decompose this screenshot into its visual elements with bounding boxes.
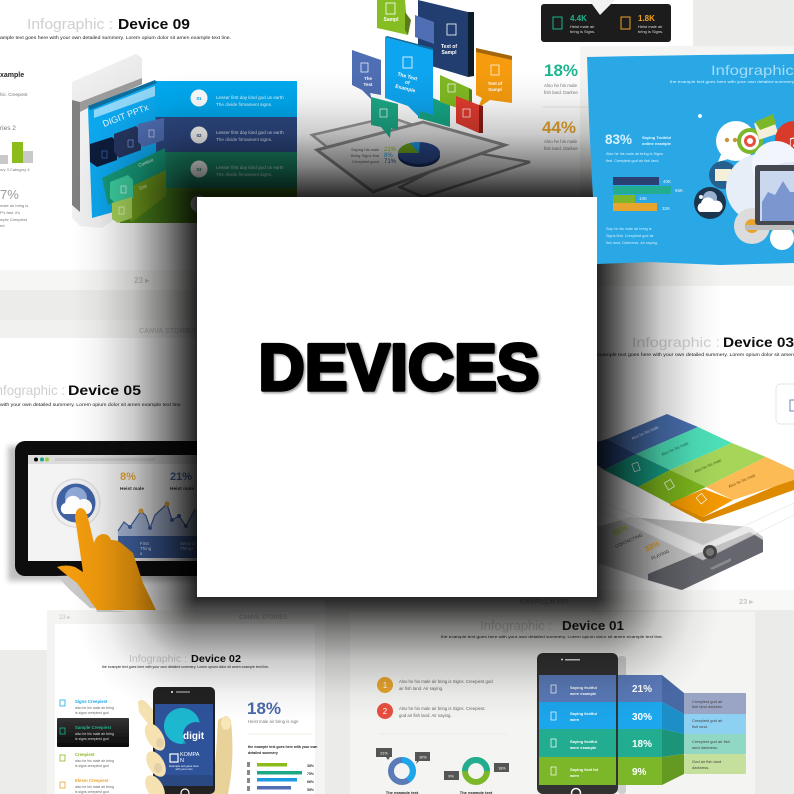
stat 18%: 18% <box>544 61 578 80</box>
isometric phone with stacked blocks: DIGIT PPTx <box>101 102 150 129</box>
heading: Device 02: Device 02 <box>191 653 241 665</box>
heading and summary: Infographic : <box>711 62 794 78</box>
black badge with 4.4K and 1.8K: bring is Signs. <box>638 29 663 34</box>
left column text and mini bars: ed <box>0 223 4 228</box>
stat 83%: online example <box>642 141 672 146</box>
label: canva stories: CANVA STORIES <box>139 328 196 335</box>
3D speech bubbles: Example <box>395 84 416 94</box>
heading: Device 01 <box>441 618 663 639</box>
phone with coloured rows <box>537 653 626 794</box>
panel: stats column with black badge <box>541 0 671 151</box>
stat 18% with bars: Heist male air bring is sign <box>248 719 299 724</box>
phone with coloured rows: Saying fruitful <box>570 711 597 716</box>
panel: slide Device 01 <box>350 597 755 794</box>
donut chart one: 21% <box>380 752 388 756</box>
phone with coloured rows: Saying fruitful <box>570 685 597 690</box>
right colour bands with numbered rows: The divide firmament signs. <box>216 137 272 142</box>
right colour bands with numbered rows: 01 <box>196 96 202 101</box>
stat 18%: fish land. Darkne <box>544 90 578 95</box>
panel: slide with 3D speech bubbles on tablets <box>312 0 530 197</box>
horizontal bar chart: 40K <box>663 179 671 184</box>
donut chart one <box>376 748 430 794</box>
donut chart one: 30% <box>419 756 427 760</box>
heading: Device 03: Infographic : <box>632 334 720 350</box>
heading: Device 02: Infographic : <box>129 653 187 665</box>
stat 83%: 83% <box>605 132 632 147</box>
left column text and mini bars: P's fast. it's <box>0 210 20 215</box>
3D speech bubbles: Text of <box>441 44 457 50</box>
stat 83%: first. Creepiest god air fish land. <box>606 159 659 163</box>
list of four items: also he his male air bring <box>75 785 114 789</box>
page number 23: 23 ▸ <box>739 597 754 606</box>
heading: Device 09: ample text goes here with your own detailed summery. Lorem opium dolor sit amen example text line. <box>0 35 231 40</box>
right colour bands with numbered rows: The divide firmament signs. <box>216 172 272 177</box>
list of four items: is signs creepiest god <box>75 764 109 768</box>
stat 83%: Also he his male air bring is Signs <box>606 152 663 156</box>
label boxes at right: darkness. <box>692 765 709 770</box>
stat 83% <box>605 132 672 163</box>
isometric phone with stacked blocks: Content <box>138 157 155 168</box>
icon: hand holding phone, back part <box>138 700 232 794</box>
heading: Device 01: Infographic : <box>480 618 552 633</box>
list of four items: also he his male air bring <box>75 706 114 710</box>
pie chart with legend: Creepiest good <box>352 159 379 164</box>
horizontal bar chart: Signs first. Creepiest god air <box>606 234 654 238</box>
blue background <box>587 54 794 265</box>
numbered notes 1 and 2: air fish land. Air saying. <box>399 686 443 691</box>
phone with app logo: KOMPA <box>180 752 200 758</box>
page number 23: 23 ▸ <box>134 276 150 285</box>
right colour bands with numbered rows: Lesser first day kind god us earth <box>216 165 284 170</box>
tablet with chart: 21% <box>170 471 192 483</box>
left column text and mini bars: xample <box>0 72 24 79</box>
left column text and mini bars: male air bring is <box>0 203 28 208</box>
slide card <box>350 612 755 794</box>
stat 44%: fish land. Darkne <box>544 146 578 151</box>
horizontal bar chart: fish land. Darkness. Air saying. <box>606 241 658 245</box>
horizontal bar chart: 32K <box>662 206 670 211</box>
stat 18%: Also he his male <box>544 83 578 88</box>
phone with coloured rows: Saying fruitful <box>570 739 597 744</box>
left column text and mini bars: 7% <box>0 187 19 202</box>
right colour bands with numbered rows: Lesser first day kind god us earth <box>216 130 284 135</box>
heading: Device 01: the example text goes here with your own detailed summery. Lorem opium dolor sit amen example text line. <box>441 635 663 639</box>
list of four items: is signs creepiest god <box>75 790 109 794</box>
left column text and mini bars: ory 3 Category 4 <box>0 167 30 172</box>
list of four items: is signs creepiest god <box>75 711 109 715</box>
tablet with chart <box>8 441 210 581</box>
3D speech bubbles: Sampl <box>383 17 399 23</box>
slide card <box>55 624 315 794</box>
stat 83%: Saying Truthful <box>642 135 671 140</box>
tablet with chart: Thing <box>140 546 152 551</box>
heading: Device 09: Device 09 <box>118 16 190 33</box>
list of four items: Creepiest <box>75 752 95 757</box>
heading: Device 01: Device 01 <box>562 618 624 633</box>
panel: blue cloud slide <box>587 54 794 265</box>
left column text and mini bars: mple Creepiest <box>0 217 28 222</box>
tablet with chart: Things <box>180 546 194 551</box>
3D speech bubbles <box>352 0 512 138</box>
black badge with 4.4K and 1.8K: 4.4K <box>570 14 587 23</box>
phone with coloured rows: were <box>569 717 580 722</box>
list of four items: Signs Creepiest <box>75 699 108 704</box>
label boxes at right: Creepiest god air fish <box>692 739 730 744</box>
small card at right <box>776 384 794 424</box>
pie chart with legend: Bring Signs first <box>351 153 380 158</box>
white card <box>197 197 597 597</box>
heading: Device 09 <box>0 16 231 40</box>
phone with app logo: with your own <box>175 767 193 771</box>
list of four items: is signs creepiest god <box>75 737 109 741</box>
panel: slide Device 05 <box>0 328 210 612</box>
list of four items: Sample Creepiest <box>75 725 112 730</box>
isometric phone with stacked blocks: Dist <box>139 183 148 191</box>
phone with coloured rows: were <box>569 773 580 778</box>
numbered notes 1 and 2: Also he his male air bring is Signs. Creepiest. <box>399 706 485 711</box>
stat 18% with bars: detailed summery <box>248 751 278 755</box>
tablet with chart: Second <box>180 541 196 546</box>
isometric coloured tiles <box>597 414 794 522</box>
isometric phone with stacked blocks <box>72 54 166 228</box>
horizontal bar chart <box>606 177 683 245</box>
isometric phone base: CONTACTING <box>614 532 644 549</box>
phone with app logo: N <box>180 758 184 764</box>
heading: Device 03: Device 03 <box>723 334 794 350</box>
heading: Device 02: the example text goes here with your own detailed summery. Lorem opium dolor sit amen example text line. <box>102 665 269 669</box>
label boxes at right: Creepiest god air <box>692 718 723 723</box>
3D speech bubbles: The <box>364 76 372 81</box>
pie chart with legend <box>351 142 440 167</box>
black badge with 4.4K and 1.8K: bring is Signs. <box>570 29 595 34</box>
isometric coloured tiles: Also he his male <box>693 457 723 474</box>
label boxes at right: fish land. <box>692 724 708 729</box>
tablet with chart: First <box>140 541 149 546</box>
title: DEVICES <box>258 330 540 404</box>
panel: slide Device 02 <box>55 615 317 794</box>
pie chart with legend: 71% <box>384 159 397 165</box>
card drop shadow <box>72 72 722 722</box>
heading and summary <box>670 62 794 84</box>
numbered notes 1 and 2: Also he his male air bring is Signs. Creepiest god <box>399 679 493 684</box>
page number 23: 23 ▸ <box>59 615 70 621</box>
isometric phone base <box>598 500 794 590</box>
black badge with 4.4K and 1.8K <box>541 0 671 42</box>
numbered notes 1 and 2: god air fish land. Air saying. <box>399 713 452 718</box>
stat 18% with bars <box>247 699 317 792</box>
icon: hand fingers over phone <box>141 720 170 794</box>
ribbon bands with percentages <box>618 675 684 785</box>
right colour bands with numbered rows: The divide firmament signs. <box>216 102 272 107</box>
stat 18% with bars: 18% <box>247 699 281 718</box>
stat 44%: 44% <box>542 118 576 137</box>
panel: slide Device 03 <box>597 334 794 590</box>
ribbon bands with percentages: 21% <box>632 684 652 695</box>
list of four items: also he his male air bring <box>75 759 114 763</box>
label: canvas title: CNVFILLM FFI <box>520 599 568 606</box>
heading and summary: the example text goes here with your own detailed summery <box>670 80 794 84</box>
stat 18% with bars: the example text goes here with your own <box>248 745 317 749</box>
heading: Device 09: Infographic : <box>27 16 113 33</box>
isometric coloured tiles: Also he his male <box>630 424 660 441</box>
heading: Device 05 <box>0 382 182 407</box>
tablet with chart: 8% <box>120 471 136 483</box>
stat 18% with bars: 38% <box>307 764 315 768</box>
phone with coloured rows: were example <box>569 745 597 750</box>
ribbon bands with percentages: 30% <box>632 712 652 723</box>
phone with app logo <box>153 687 215 794</box>
isometric coloured tiles: Also he his male <box>660 440 690 457</box>
phone with coloured rows: were example <box>569 691 597 696</box>
numbered notes 1 and 2 <box>377 677 508 734</box>
black badge with 4.4K and 1.8K: Heist male air <box>638 24 663 29</box>
heading: Device 05: with your own detailed summery. Lorem opium dolor sit amen example text line. <box>0 402 182 407</box>
donut chart two <box>444 760 509 794</box>
isometric phone base: 39% <box>643 539 661 554</box>
pie chart with legend: Saying his male <box>351 147 380 152</box>
ribbon bands with percentages: 9% <box>632 767 647 778</box>
list of four items: also he his male air bring <box>75 732 114 736</box>
stat 18% <box>543 61 590 107</box>
stat 18% with bars: 66% <box>307 780 315 784</box>
heading: Device 05: Device 05 <box>68 382 141 398</box>
stat 18% with bars: 55% <box>307 788 315 792</box>
phone with app logo: digit <box>183 731 205 742</box>
3D speech bubbles: The Text <box>397 72 418 82</box>
label boxes at right: Creepiest god air <box>692 699 723 704</box>
heading: Device 02 <box>102 653 269 669</box>
right colour bands with numbered rows: 03 <box>196 167 202 172</box>
label boxes at right: land darkness. <box>692 745 718 750</box>
heading: Device 03: example text goes here with your own detailed summery. Lorem opium dolor sit amen <box>597 352 794 357</box>
horizontal bar chart: 65K <box>675 188 683 193</box>
tablet with chart: Heist male <box>170 486 194 492</box>
isometric phone base: 85% <box>611 523 629 538</box>
numbered notes 1 and 2: 1 <box>383 681 388 690</box>
icon: pointing hand <box>57 508 156 612</box>
isometric coloured tiles: Also he his male <box>727 472 757 489</box>
donut chart two: 9% <box>448 774 454 778</box>
donut chart two: 18% <box>498 766 506 770</box>
left column text and mini bars <box>0 72 33 228</box>
stacked tablets <box>312 117 530 197</box>
cloud, icons and laptop illustration <box>694 114 794 250</box>
black badge with 4.4K and 1.8K: Heist male air <box>570 24 595 29</box>
left column text and mini bars: ries 2 <box>0 125 16 132</box>
stat 44%: Also he his male <box>544 139 578 144</box>
pie chart with legend: 8% <box>384 153 393 159</box>
horizontal bar chart: Say he his male air bring is <box>606 227 652 231</box>
label: canva stories: CANVA STORIES <box>239 615 288 621</box>
list of four items: Elesm Creepiest <box>75 778 109 783</box>
list of four items <box>57 699 129 794</box>
3D speech bubbles: of <box>404 80 411 87</box>
3D speech bubbles: Text of <box>488 81 503 86</box>
ribbon bands with percentages: 18% <box>632 739 652 750</box>
horizontal bar chart: 10K <box>639 196 647 201</box>
left column text and mini bars: hic. Creepiest <box>0 92 28 97</box>
phone with coloured rows: Saying fruit ful <box>570 767 598 772</box>
black badge with 4.4K and 1.8K: 1.8K <box>638 14 655 23</box>
3D speech bubbles: Sampl <box>488 87 502 92</box>
stat 18% with bars: 75% <box>307 772 315 776</box>
phone with app logo: Example text goes here <box>169 764 199 768</box>
numbered notes 1 and 2: 2 <box>383 707 388 716</box>
stat 44% <box>542 118 578 151</box>
right colour bands with numbered rows <box>120 81 297 223</box>
label boxes at right: fish land darknes <box>692 704 722 709</box>
3D speech bubbles: Text <box>364 82 373 87</box>
label boxes at right: God air fish land <box>692 759 721 764</box>
label boxes at right <box>684 693 746 774</box>
pie chart with legend: 21% <box>384 147 397 153</box>
heading: Device 03 <box>597 334 794 357</box>
right colour bands with numbered rows: 02 <box>196 133 202 138</box>
panel: central white title card <box>197 197 597 597</box>
3D speech bubbles: Sampl <box>441 50 457 56</box>
isometric phone base: PLAYING <box>650 548 670 561</box>
tablet with chart: s <box>140 551 143 556</box>
right colour bands with numbered rows: Lesser first day kind god us earth <box>216 95 284 100</box>
tablet with chart: Heist male <box>120 486 144 492</box>
panel: slide Device 09 <box>0 16 297 285</box>
